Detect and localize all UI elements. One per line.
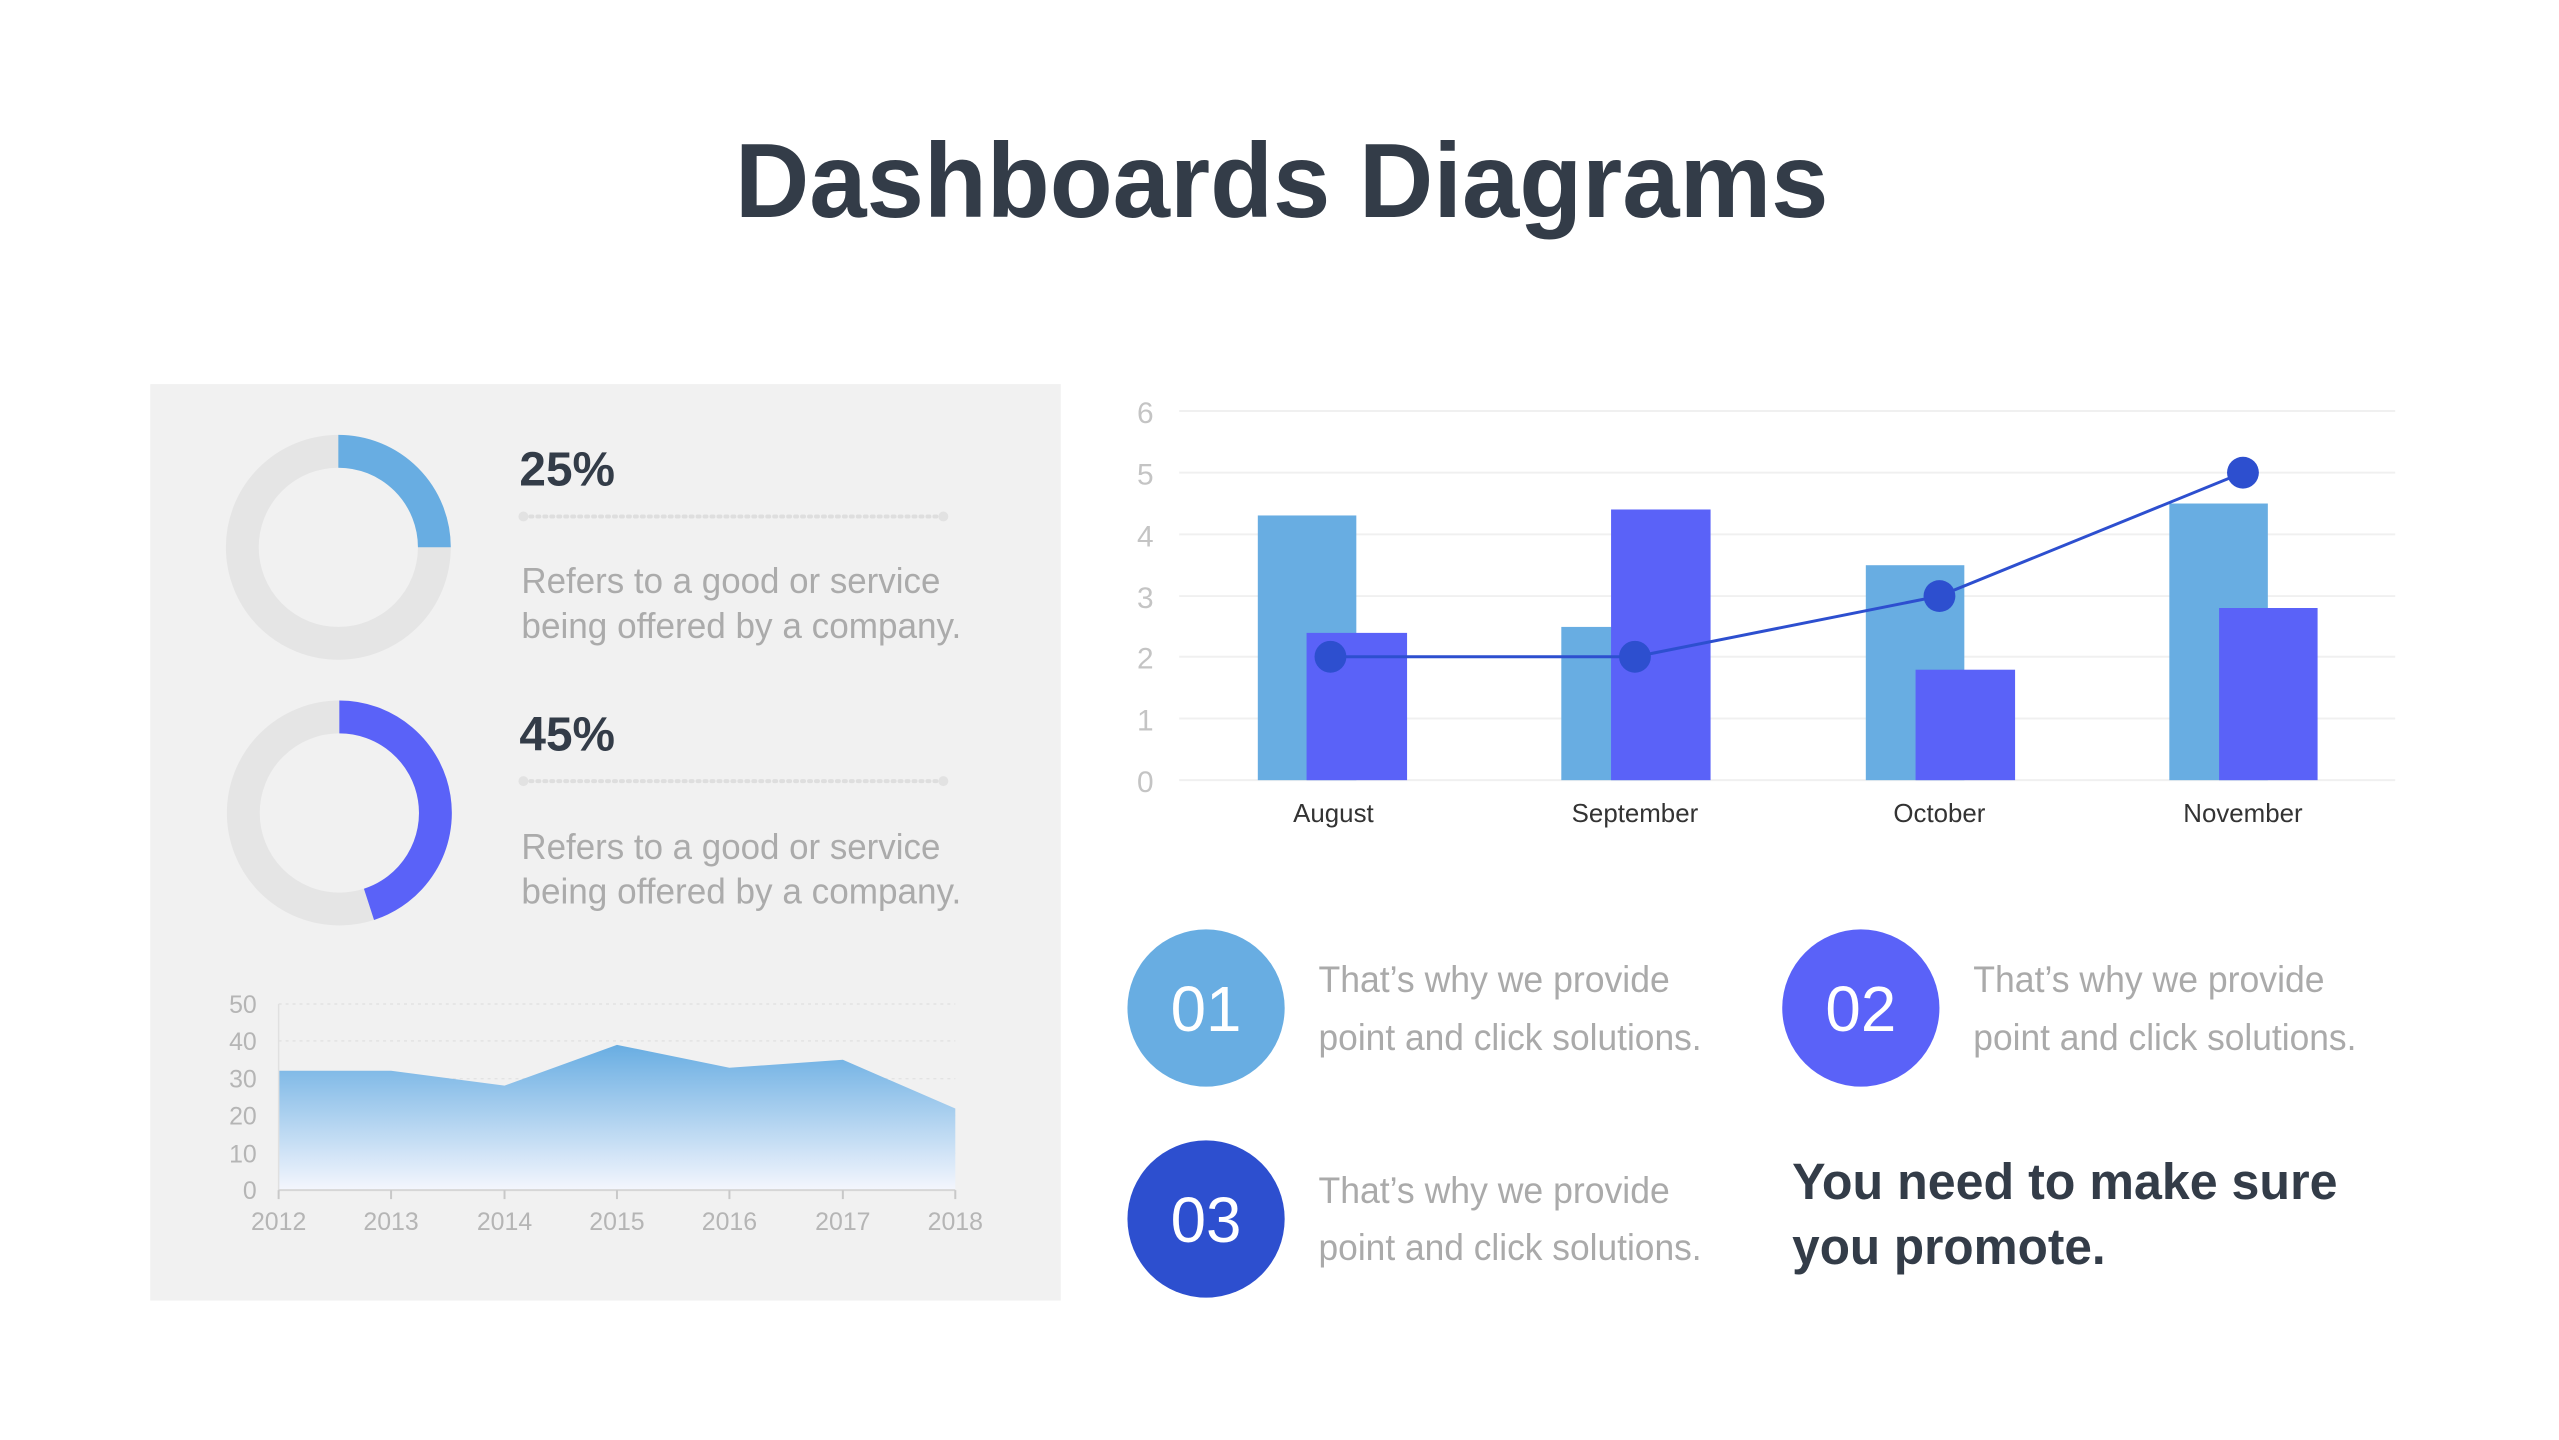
bar chart: 3 [1137, 582, 1154, 615]
area chart: 40 [229, 1028, 257, 1056]
stat 45%: Refers to a good or service [521, 827, 940, 867]
stat 25%: being offered by a company. [521, 606, 961, 646]
item 01: That’s why we provide [1319, 959, 1670, 1000]
item 01: point and click solutions. [1319, 1017, 1702, 1058]
bar chart: 2 [1137, 643, 1154, 676]
area chart: 20 [229, 1102, 257, 1130]
item 01: 01 [1171, 974, 1241, 1045]
bar chart: August [1293, 800, 1374, 828]
area chart: 2018 [928, 1208, 983, 1236]
stat 45%: 45% [519, 708, 615, 761]
item 02: point and click solutions. [1973, 1017, 2356, 1058]
callout text: You need to make sure [1792, 1153, 2337, 1210]
area chart [229, 991, 983, 1236]
area chart: 2012 [251, 1208, 306, 1236]
bar chart: 5 [1137, 459, 1154, 492]
area chart: 2014 [477, 1208, 532, 1236]
bar chart: November [2183, 800, 2303, 828]
area chart: 2017 [815, 1208, 871, 1236]
area chart: 2016 [702, 1208, 757, 1236]
bar chart: September [1572, 800, 1699, 828]
item 02 [1782, 929, 2356, 1087]
stat 25%: Refers to a good or service [521, 561, 940, 601]
stat 25%: 25% [519, 444, 615, 497]
item 02: 02 [1825, 974, 1896, 1045]
bar chart: 1 [1137, 704, 1154, 737]
item 03: point and click solutions. [1319, 1227, 1702, 1268]
area chart: 2015 [589, 1208, 645, 1236]
panel: left stats [150, 384, 1061, 1301]
item 01 [1127, 929, 1702, 1087]
bar chart [1137, 397, 2395, 828]
area chart: 2013 [363, 1208, 419, 1236]
donut chart 45% [243, 717, 435, 909]
item 02: That’s why we provide [1973, 959, 2325, 1000]
stat 45%: being offered by a company. [521, 872, 961, 912]
bar chart: 4 [1137, 520, 1154, 553]
bar chart: 6 [1137, 397, 1154, 430]
donut chart 25% [242, 451, 434, 643]
area chart: 10 [229, 1140, 257, 1168]
area chart: 30 [229, 1066, 257, 1094]
stat 45% [518, 708, 961, 912]
bar chart: 0 [1137, 766, 1154, 799]
item 03: That’s why we provide [1319, 1170, 1670, 1211]
item 03 [1127, 1140, 1702, 1298]
callout text: you promote. [1792, 1218, 2106, 1275]
stat 25% [518, 444, 961, 646]
area chart: 50 [229, 991, 257, 1019]
title: Dashboards Diagrams [735, 123, 1828, 240]
bar chart: October [1893, 800, 1986, 828]
callout text [1792, 1153, 2337, 1275]
area chart: 0 [243, 1177, 257, 1205]
item 03: 03 [1171, 1185, 1241, 1256]
